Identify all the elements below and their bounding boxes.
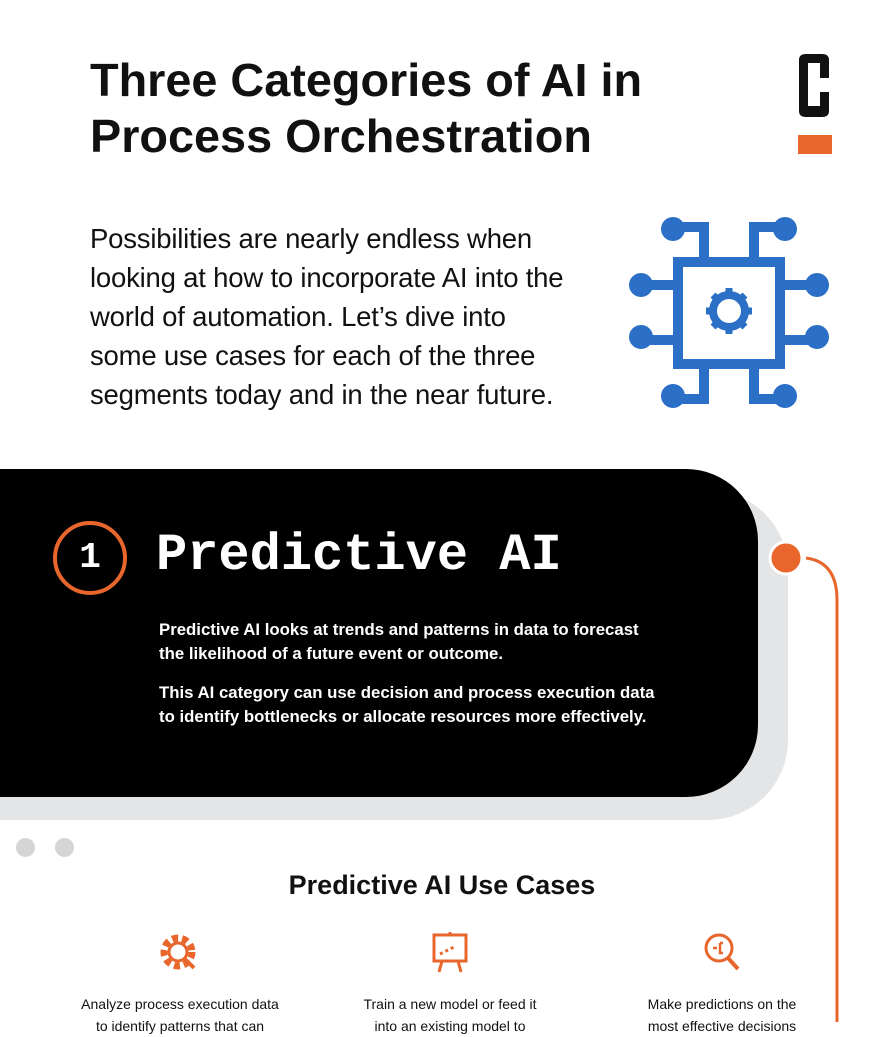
description: the likelihood of a future event or outcome.: [159, 644, 503, 663]
use case 2: Train a new model or feed it: [363, 996, 536, 1012]
decorative dots: [16, 838, 74, 857]
intro text: looking at how to incorporate AI into the: [90, 262, 563, 293]
title: Three Categories of AI in: [90, 54, 642, 106]
icon: magnifier: [704, 934, 740, 970]
number badge: 1: [79, 537, 101, 578]
text: into an existing model to: [374, 1018, 525, 1034]
description: to identify bottlenecks or allocate resources more effectively.: [159, 707, 646, 726]
timeline connector: [768, 541, 838, 1022]
text: most effective decisions: [648, 1018, 796, 1034]
text: to identify patterns that can: [96, 1018, 264, 1034]
panel: predictive AI: [0, 469, 758, 797]
icon: gear magnifier: [160, 934, 196, 970]
use case 3: Make predictions on the: [648, 996, 796, 1012]
use case 2: [363, 932, 536, 1034]
logo: [798, 54, 832, 154]
description: Predictive AI looks at trends and patterns in data to forecast: [159, 620, 639, 639]
use case 3: [648, 934, 796, 1034]
intro text: segments today and in the near future.: [90, 379, 553, 410]
use case 1: [81, 934, 279, 1034]
use cases heading: Predictive AI Use Cases: [289, 870, 595, 900]
intro text: some use cases for each of the three: [90, 340, 535, 371]
use case 1: Analyze process execution data: [81, 996, 279, 1012]
title: Process Orchestration: [90, 110, 592, 162]
panel shadow: [0, 490, 788, 820]
intro text: Possibilities are nearly endless when: [90, 223, 532, 254]
icon: AI chip with gear: [629, 217, 829, 408]
number badge: [53, 521, 127, 595]
description: This AI category can use decision and process execution data: [159, 683, 655, 702]
icon: presentation board: [432, 932, 468, 972]
description: [159, 620, 655, 726]
intro text: [90, 223, 563, 410]
heading: Predictive AI: [156, 526, 562, 585]
title: [90, 54, 642, 162]
intro text: world of automation. Let’s dive into: [90, 301, 506, 332]
